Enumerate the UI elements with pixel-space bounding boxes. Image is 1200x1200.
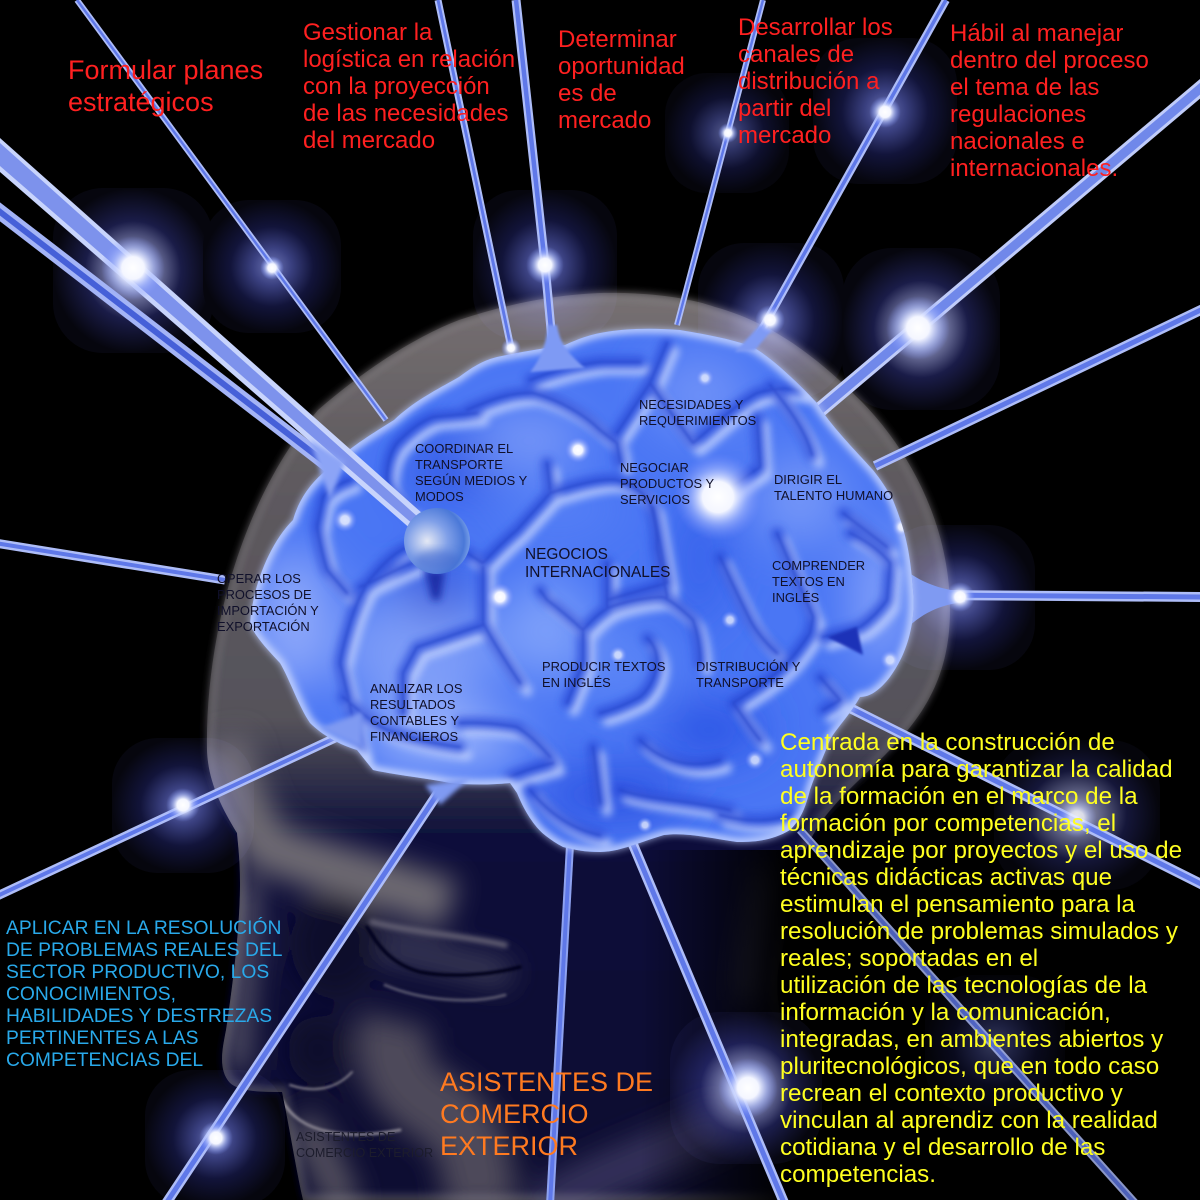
label: coordinar el transporte xyxy=(415,441,527,504)
label: operar los procesos xyxy=(217,571,319,634)
text: Gestionar la logística: con la proyección xyxy=(303,73,490,100)
ray: cheek xyxy=(165,790,440,1200)
neck fade xyxy=(640,850,815,1200)
label: comprender textos en inglés: INGLÉS xyxy=(772,590,819,605)
text: Hábil al manejar: nacionales e xyxy=(950,128,1085,155)
text: Hábil al manejar: el tema de las xyxy=(950,74,1099,101)
ray: top 3 xyxy=(677,0,763,325)
text: Gestionar la logística xyxy=(303,19,515,154)
label: operar los procesos: OPERAR LOS xyxy=(217,571,301,586)
head silhouette xyxy=(207,293,950,1200)
text: centrada en la construcción: resolución de problemas simulados y xyxy=(780,918,1178,945)
label: negociar productos y servicios: NEGOCIAR xyxy=(620,460,689,475)
label: negocios internacionales xyxy=(525,546,670,581)
flare: left double ray into brain xyxy=(310,440,345,500)
label: analizar los resultados: ANALIZAR LOS xyxy=(370,681,462,696)
text: aplicar en la resolución: HABILIDADES Y DESTREZAS xyxy=(6,1006,272,1027)
label: coordinar el transporte: COORDINAR EL xyxy=(415,441,513,456)
ray: left horizontal xyxy=(0,543,225,580)
dark patches xyxy=(425,570,863,655)
text: Desarrollar los canales: distribución a xyxy=(738,68,879,95)
label: negociar productos y servicios: PRODUCTOS Y xyxy=(620,476,714,491)
heading: Formular planes estratégicos xyxy=(68,55,263,117)
brain xyxy=(240,320,930,860)
label: asistentes de comercio exterior small xyxy=(296,1130,433,1160)
text: Desarrollar los canales: canales de xyxy=(738,41,854,68)
label: asistentes de comercio exterior small: ASISTENTES DE xyxy=(296,1130,395,1144)
label: operar los procesos: PROCESOS DE xyxy=(217,587,312,602)
label: negociar productos y servicios: SERVICIOS xyxy=(620,492,690,507)
label: necesidades y requerimientos xyxy=(639,397,756,428)
label: asistentes de comercio exterior small: COMERCIO EXTERIOR xyxy=(296,1146,433,1160)
text: Hábil al manejar: dentro del proceso xyxy=(950,47,1149,74)
ray: top 4 xyxy=(756,0,946,340)
label: coordinar el transporte: SEGÚN MEDIOS Y xyxy=(415,473,527,488)
label: dirigir el talento humano: TALENTO HUMANO xyxy=(774,488,893,503)
head rim xyxy=(207,293,950,1200)
text: aplicar en la resolución: PERTINENTES A LAS xyxy=(6,1028,199,1049)
label: necesidades y requerimientos: NECESIDADES Y xyxy=(639,397,743,412)
flare: lower left into head xyxy=(320,712,362,748)
label: producir textos en inglés: PRODUCIR TEXTOS xyxy=(542,659,665,674)
text: centrada en la construcción: estimulan el pensamiento para la xyxy=(780,891,1135,918)
left wide ray into sphere xyxy=(0,138,432,537)
label: analizar los resultados: CONTABLES Y xyxy=(370,713,459,728)
label: distribución y transporte: DISTRIBUCIÓN Y xyxy=(696,659,800,674)
text: centrada en la construcción: información y la comunicación, xyxy=(780,999,1111,1026)
ray: right horizontal xyxy=(905,570,1200,630)
text: centrada en la construcción: integradas, en ambientes abiertos y xyxy=(780,1026,1163,1053)
text: centrada en la construcción: recrean el contexto productivo y xyxy=(780,1080,1123,1107)
flare: bottom ray into brain xyxy=(425,778,470,805)
label: analizar los resultados xyxy=(370,681,462,744)
ray: left double xyxy=(0,208,335,470)
text: aplicar en la resolución: APLICAR EN LA RESOLUCIÓN xyxy=(6,918,281,939)
label: analizar los resultados: FINANCIEROS xyxy=(370,729,458,744)
label: operar los procesos: IMPORTACIÓN Y xyxy=(217,603,319,618)
ray: top 2 xyxy=(516,0,552,340)
flare: top ray into brain xyxy=(530,325,585,372)
ray: far lower right xyxy=(800,830,1135,1200)
text: Gestionar la logística: Gestionar la xyxy=(303,19,432,46)
text: Determinar oportunidad: oportunidad xyxy=(558,53,685,80)
text: Hábil al manejar: internacionales. xyxy=(950,155,1118,182)
label: distribución y transporte: TRANSPORTE xyxy=(696,675,784,690)
sphere on brain xyxy=(404,508,470,574)
text: centrada en la construcción: cotidiana y el desarrollo de las xyxy=(780,1134,1105,1161)
heading: asistentes de comercio exterior: EXTERIOR xyxy=(440,1131,578,1161)
text: Hábil al manejar: Hábil al manejar xyxy=(950,20,1123,47)
text: aplicar en la resolución: CONOCIMIENTOS, xyxy=(6,984,176,1005)
heading: asistentes de comercio exterior: ASISTENTES DE xyxy=(440,1067,653,1097)
ray: upper right wide xyxy=(725,82,1200,490)
light points xyxy=(101,96,1097,1155)
brain shading patches xyxy=(255,355,905,819)
eye and lid xyxy=(282,922,520,1135)
brain edge light xyxy=(250,329,914,852)
heading: asistentes de comercio exterior: COMERCIO xyxy=(440,1099,588,1129)
text: centrada en la construcción: reales; soportadas en el xyxy=(780,945,1038,972)
text: aplicar en la resolución: SECTOR PRODUCTIVO, LOS xyxy=(6,962,269,983)
label: comprender textos en inglés: COMPRENDER xyxy=(772,558,865,573)
text: centrada en la construcción: Centrada en la construcción de xyxy=(780,729,1115,756)
brain sparkles xyxy=(333,369,912,833)
ray: top 1 xyxy=(438,0,511,348)
face highlights xyxy=(222,740,770,1200)
text: Determinar oportunidad: Determinar xyxy=(558,26,677,53)
text: centrada en la construcción xyxy=(780,729,1182,1188)
text: Gestionar la logística: de las necesidades xyxy=(303,100,508,127)
text: Determinar oportunidad: es de xyxy=(558,80,617,107)
label: negociar productos y servicios xyxy=(620,460,714,507)
label: negocios internacionales: INTERNACIONALES xyxy=(525,564,670,581)
text: centrada en la construcción: autonomía para garantizar la calidad xyxy=(780,756,1173,783)
ray: lower right xyxy=(850,708,1200,886)
heading: asistentes de comercio exterior xyxy=(440,1067,653,1161)
label: dirigir el talento humano: DIRIGIR EL xyxy=(774,472,842,487)
label: comprender textos en inglés: TEXTOS EN xyxy=(772,574,845,589)
label: dirigir el talento humano xyxy=(774,472,893,503)
text: Gestionar la logística: logística en relación xyxy=(303,46,515,73)
heading: Formular planes estratégicos: Formular planes xyxy=(68,55,263,85)
brain folds: highlight, soft shadow, crisp sulcus xyxy=(324,351,897,843)
text: Desarrollar los canales xyxy=(738,14,893,149)
label: producir textos en inglés xyxy=(542,659,665,690)
text: aplicar en la resolución xyxy=(6,917,282,1071)
outer brain glow xyxy=(250,329,914,852)
label: negocios internacionales: NEGOCIOS xyxy=(525,546,608,563)
text: aplicar en la resolución: COMPETENCIAS DEL xyxy=(6,1050,203,1071)
text: Hábil al manejar: regulaciones xyxy=(950,101,1086,128)
text: centrada en la construcción: vinculan al aprendiz con la realidad xyxy=(780,1107,1158,1134)
text: Determinar oportunidad xyxy=(558,26,685,134)
text: centrada en la construcción: utilización de las tecnologías de la xyxy=(780,972,1147,999)
label: coordinar el transporte: MODOS xyxy=(415,489,464,504)
text: centrada en la construcción: técnicas didácticas activas que xyxy=(780,864,1112,891)
text: Gestionar la logística: del mercado xyxy=(303,127,435,154)
text: centrada en la construcción: de la formación en el marco de la xyxy=(780,783,1138,810)
text: centrada en la construcción: aprendizaje por proyectos y el uso de xyxy=(780,837,1182,864)
label: producir textos en inglés: EN INGLÉS xyxy=(542,675,611,690)
ray: lower left xyxy=(0,738,335,897)
text: centrada en la construcción: formación por competencias, el xyxy=(780,810,1116,837)
text: Desarrollar los canales: mercado xyxy=(738,122,831,149)
label: coordinar el transporte: TRANSPORTE xyxy=(415,457,503,472)
ray: lower right down xyxy=(610,790,785,1200)
ray: lower centre xyxy=(550,845,570,1200)
text: Desarrollar los canales: partir del xyxy=(738,95,831,122)
label: comprender textos en inglés xyxy=(772,558,865,605)
flare: upper ray into brain xyxy=(735,325,772,352)
text: centrada en la construcción: pluritecnológicos, que en todo caso xyxy=(780,1053,1159,1080)
text: Hábil al manejar xyxy=(950,20,1149,182)
label: necesidades y requerimientos: REQUERIMIENTOS xyxy=(639,413,756,428)
ray: right xyxy=(875,308,1200,466)
text: Determinar oportunidad: mercado xyxy=(558,107,651,134)
label: distribución y transporte xyxy=(696,659,800,690)
heading: Formular planes estratégicos: estratégicos xyxy=(68,87,214,117)
label: analizar los resultados: RESULTADOS xyxy=(370,697,455,712)
text: aplicar en la resolución: DE PROBLEMAS REALES DEL xyxy=(6,940,282,961)
ray: upper left thin xyxy=(77,0,386,420)
label: operar los procesos: EXPORTACIÓN xyxy=(217,619,310,634)
text: centrada en la construcción: competencias. xyxy=(780,1161,936,1188)
text: Desarrollar los canales: Desarrollar los xyxy=(738,14,893,41)
